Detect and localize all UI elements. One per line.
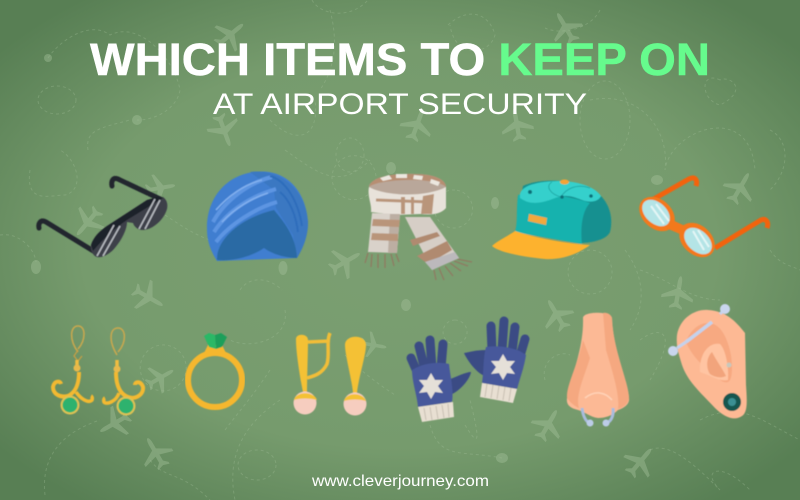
- icon: teal baseball cap: [492, 180, 611, 259]
- icon: green drop earrings: [53, 326, 143, 416]
- icon: nose with septum ring: [567, 313, 629, 426]
- subtitle: AT AIRPORT SECURITY: [213, 88, 587, 121]
- icon: orange glasses: [632, 178, 768, 264]
- icon: gold ring with emerald: [188, 333, 242, 407]
- icon: pierced ear: [668, 304, 747, 418]
- icon: navy gloves with stars: [411, 321, 526, 422]
- icon: striped scarf: [365, 174, 472, 280]
- icon: gold and pearl earrings: [294, 333, 366, 416]
- icon: black sunglasses: [39, 178, 167, 257]
- icon: blue turban: [207, 172, 308, 261]
- title: WHICH ITEMS TO KEEP ON: [90, 34, 710, 85]
- website footer: www.cleverjourney.com: [311, 473, 489, 490]
